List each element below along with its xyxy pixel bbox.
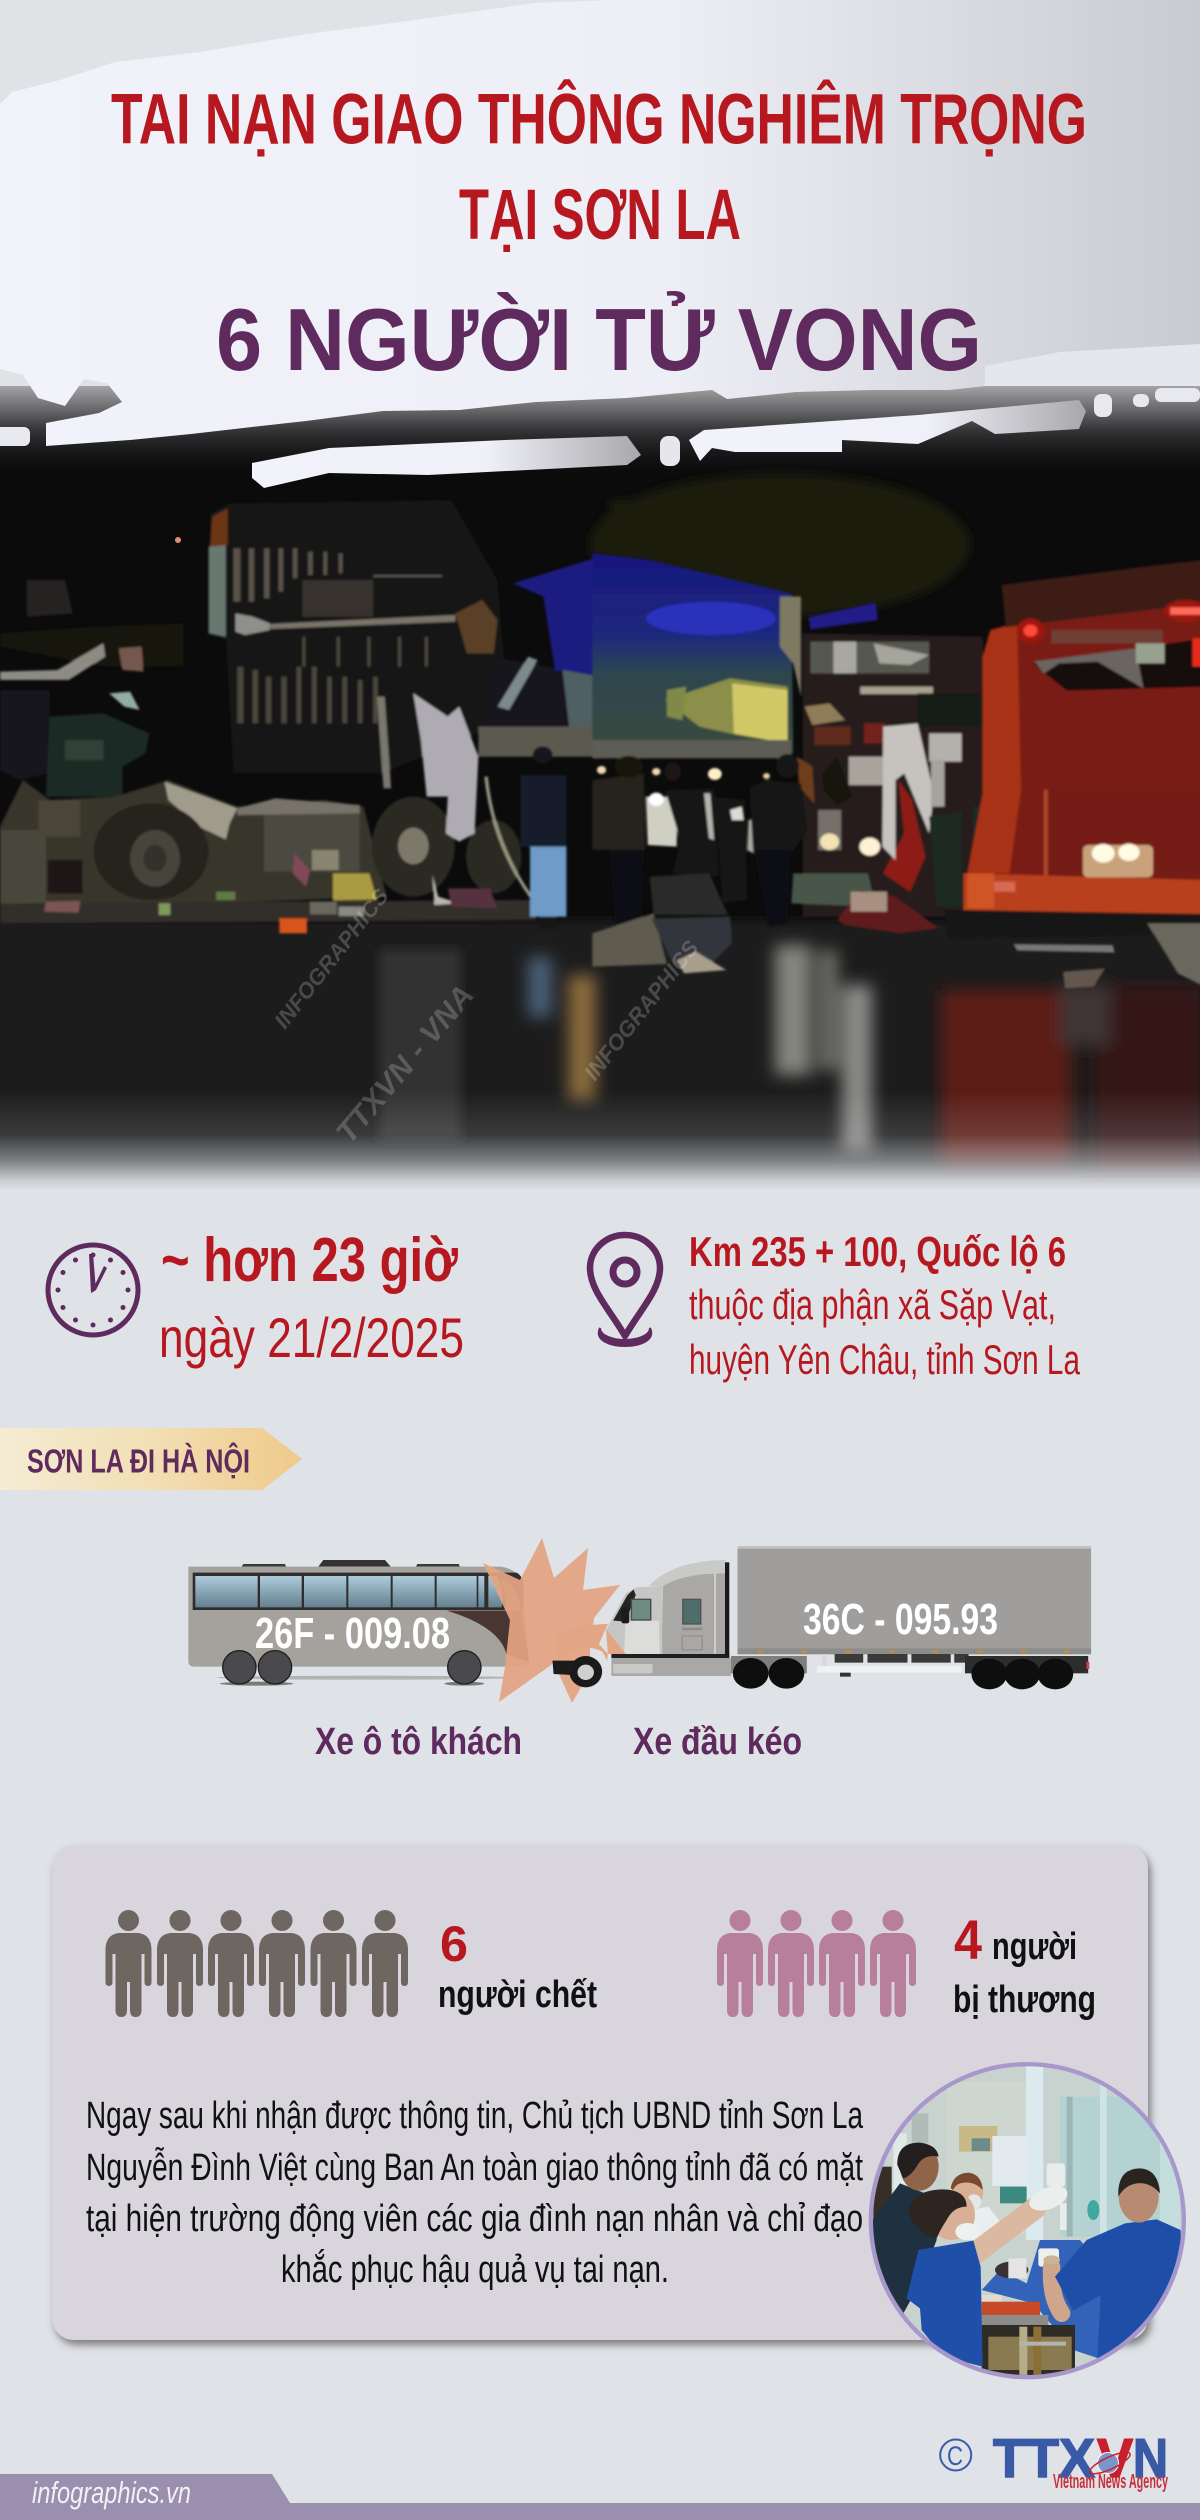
label: truck: Xe đầu kéo — [633, 1721, 802, 1763]
paragraph: Ngay sau khi nhận được thông tin, Chủ tịch UBND tỉnh Sơn La — [86, 2095, 864, 2137]
plate numbers — [255, 1595, 998, 1658]
vehicle labels — [315, 1721, 802, 1763]
copyright mark: C — [947, 2441, 963, 2471]
photo watermark: TTXVN - VNA — [330, 979, 481, 1149]
photo watermark: INFOGRAPHICS — [579, 935, 704, 1085]
rubble and wet tarmac — [944, 910, 1200, 938]
bus — [188, 1560, 529, 1686]
debris behind truck — [803, 633, 987, 917]
dead count — [438, 1916, 597, 2016]
injured count: 4 — [954, 1908, 982, 1971]
wreck and trailer, left half — [0, 500, 601, 933]
truck plate: 36C - 095.93 — [803, 1595, 998, 1644]
photo watermark — [269, 883, 704, 1149]
hanging clothes — [377, 697, 391, 788]
fallen tarp on road — [650, 873, 728, 915]
standing man in dark suit — [873, 2142, 939, 2313]
cab — [552, 1560, 731, 1687]
standing man in jeans — [483, 775, 532, 899]
injured count: người — [992, 1926, 1077, 1968]
accident scene photo — [0, 385, 1200, 1200]
TTXVN logo: V — [1097, 2427, 1133, 2489]
TTXVN logo: N — [1133, 2427, 1168, 2489]
panel: casualties — [52, 1845, 1148, 2340]
paragraph: tại hiện trường động viên các gia đình nạn nhân và chỉ đạo — [86, 2198, 863, 2240]
bus plate: 26F - 009.08 — [255, 1609, 450, 1658]
red coach — [993, 606, 1200, 877]
direction tag — [0, 1428, 302, 1490]
title — [111, 80, 1087, 389]
time text — [159, 1226, 464, 1369]
blue tarp corner and dark flap — [482, 657, 572, 733]
icons: four injured — [717, 1910, 916, 2017]
rear lamps on left truck — [175, 537, 181, 543]
nurse in blue raising IV bag — [907, 2181, 1071, 2367]
direction label: SƠN LA ĐI HÀ NỘI — [27, 1442, 250, 1480]
road surface — [0, 473, 1200, 1200]
paragraph: Nguyễn Đình Việt cùng Ban An toàn giao thông tỉnh đã có mặt — [86, 2146, 863, 2189]
icon: location pin — [590, 1235, 660, 1346]
location text — [689, 1228, 1080, 1383]
hospital photo circle — [868, 2062, 1186, 2380]
injured count — [953, 1908, 1096, 2021]
footer band — [0, 2474, 1200, 2520]
dead count: 6 — [440, 1916, 468, 1972]
photo watermark: INFOGRAPHICS — [269, 883, 394, 1033]
mud and tanks — [0, 780, 387, 910]
title line 2: TẠI SƠN LA — [459, 176, 741, 255]
address line 2: thuộc địa phận xã Sặp Vạt, — [689, 1281, 1056, 1328]
title line 3: 6 NGƯỜI TỬ VONG — [216, 290, 982, 389]
TTXVN logo — [993, 2427, 1168, 2493]
date: ngày 21/2/2025 — [159, 1306, 464, 1369]
copyright mark — [940, 2440, 971, 2471]
tractor truck — [552, 1546, 1091, 1689]
patient and bed — [982, 2240, 1103, 2375]
trailer undercarriage — [731, 1654, 1089, 1689]
trailer box — [737, 1546, 1091, 1654]
icons: six dead — [106, 1910, 408, 2017]
wet road reflections — [528, 945, 1200, 1175]
paragraph — [86, 2095, 864, 2291]
label: bus: Xe ô tô khách — [315, 1721, 522, 1763]
crushed cab — [27, 580, 73, 617]
icon: clock — [48, 1245, 138, 1335]
TTXVN logo: TTX — [993, 2427, 1095, 2489]
time bold: ~ hơn 23 giờ — [161, 1226, 459, 1295]
second nurse in white — [951, 2173, 1003, 2240]
tarp, second truck and red coach, right half — [592, 553, 1200, 988]
lights and crowd — [708, 768, 722, 780]
injured count: bị thương — [953, 1979, 1096, 2021]
source label: infographics.vn — [32, 2475, 191, 2510]
dead count: người chết — [438, 1974, 597, 2016]
address bold: Km 235 + 100, Quốc lộ 6 — [689, 1228, 1066, 1275]
collision burst — [483, 1538, 620, 1703]
paragraph: khắc phục hậu quả vụ tai nạn. — [281, 2248, 669, 2291]
medic in blue with back turned — [1043, 2168, 1182, 2359]
torn paper header background — [0, 0, 1200, 488]
